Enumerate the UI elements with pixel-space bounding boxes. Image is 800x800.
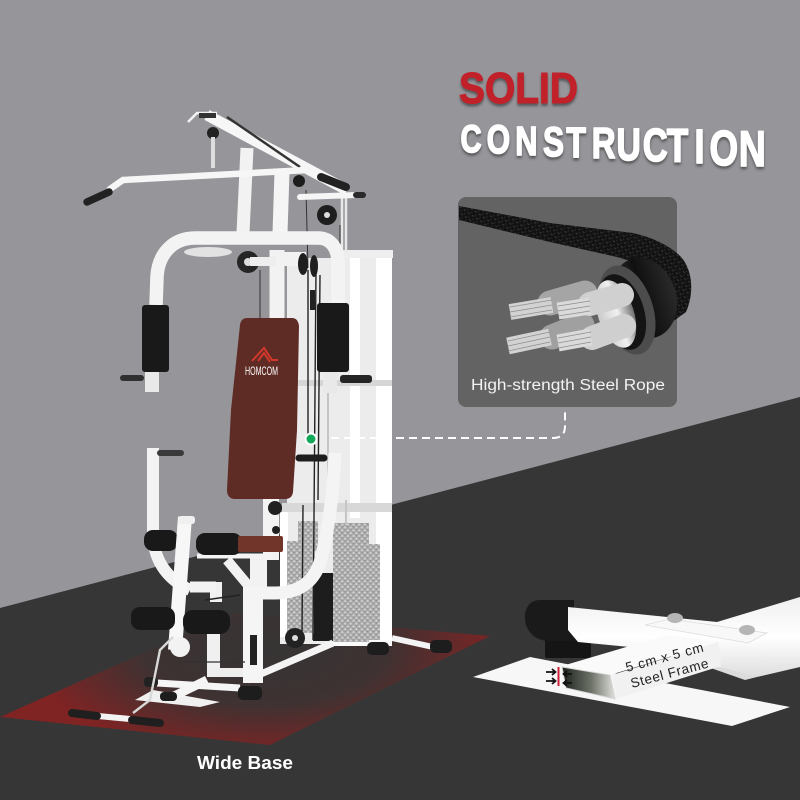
- left chest pad and handle: [120, 305, 169, 392]
- wire core: top right: [558, 295, 622, 316]
- thickness arrows: [546, 669, 572, 686]
- base plate: [473, 657, 790, 726]
- backrest with logo: [227, 318, 299, 499]
- title: construction: R: [592, 120, 616, 168]
- thigh roller pads: [131, 516, 283, 657]
- silver shield: [588, 275, 644, 353]
- black end cap: [525, 600, 574, 641]
- title: construction: U: [617, 120, 641, 170]
- dashed connector line: [331, 408, 565, 438]
- wide base red floor marking: [0, 613, 490, 745]
- lat pulldown top arm: [188, 113, 347, 318]
- title: construction: O: [710, 122, 738, 176]
- weight stack tower: [280, 250, 393, 646]
- weight plates: [287, 521, 380, 642]
- front floor frame: [135, 668, 262, 707]
- title: construction: [461, 118, 766, 177]
- wall thickness marker: [558, 667, 560, 686]
- steel frame detail: [473, 597, 800, 726]
- side tube: [568, 597, 800, 677]
- braided cable: [459, 206, 691, 325]
- wire core: bottom right: [558, 326, 624, 348]
- seat post and base: [175, 497, 452, 683]
- title: construction: N: [515, 118, 537, 164]
- black cable jacket: [601, 249, 687, 347]
- title: construction: C: [461, 118, 482, 161]
- title: construction: S: [543, 118, 564, 165]
- small lower plate: [705, 666, 757, 680]
- cable pull handle and chain: [72, 637, 173, 723]
- guide rods and cables: [260, 190, 346, 640]
- chest press arch: [156, 238, 338, 305]
- tube top face: [562, 635, 718, 675]
- title: construction: T: [566, 120, 586, 167]
- wire core: bottom left: [508, 325, 582, 351]
- home gym machine: [72, 113, 452, 723]
- title: solid: SOLID: [459, 64, 578, 113]
- background: dark floor: [0, 397, 800, 800]
- title: construction: C: [643, 119, 668, 171]
- bolt: [667, 613, 683, 623]
- panel background: [458, 197, 677, 407]
- title: construction: N: [739, 122, 766, 177]
- arch fittings and pulleys: [184, 247, 318, 310]
- inner black band: [589, 268, 655, 356]
- tube side face: [612, 642, 721, 699]
- bolt: [739, 625, 755, 635]
- collar ring: [588, 258, 666, 362]
- title: construction: O: [487, 118, 510, 162]
- frame type text: Steel Frame: [629, 656, 710, 691]
- title: construction: I: [694, 120, 705, 173]
- label: wide base: Wide Base: [197, 753, 293, 773]
- panel: high-strength steel rope: [458, 197, 691, 407]
- right press arm: [245, 453, 335, 593]
- wire core: top left: [510, 293, 585, 317]
- rubber foot: [545, 638, 591, 658]
- logo roof: [252, 348, 278, 362]
- green marker dot: [306, 434, 316, 444]
- logo wordmark: HOMCOM: [245, 364, 278, 378]
- frame size text: 5 cm x 5 cm: [624, 640, 705, 675]
- upper pulley: [317, 205, 337, 225]
- right chest pad and handle: [317, 303, 372, 393]
- left press arm: [153, 448, 190, 590]
- lat pulldown bar: [87, 170, 363, 202]
- title: construction: T: [667, 119, 688, 172]
- tube opening: [562, 667, 615, 699]
- bolted plate: [645, 619, 767, 643]
- rope caption: High-strength Steel Rope: [471, 377, 665, 394]
